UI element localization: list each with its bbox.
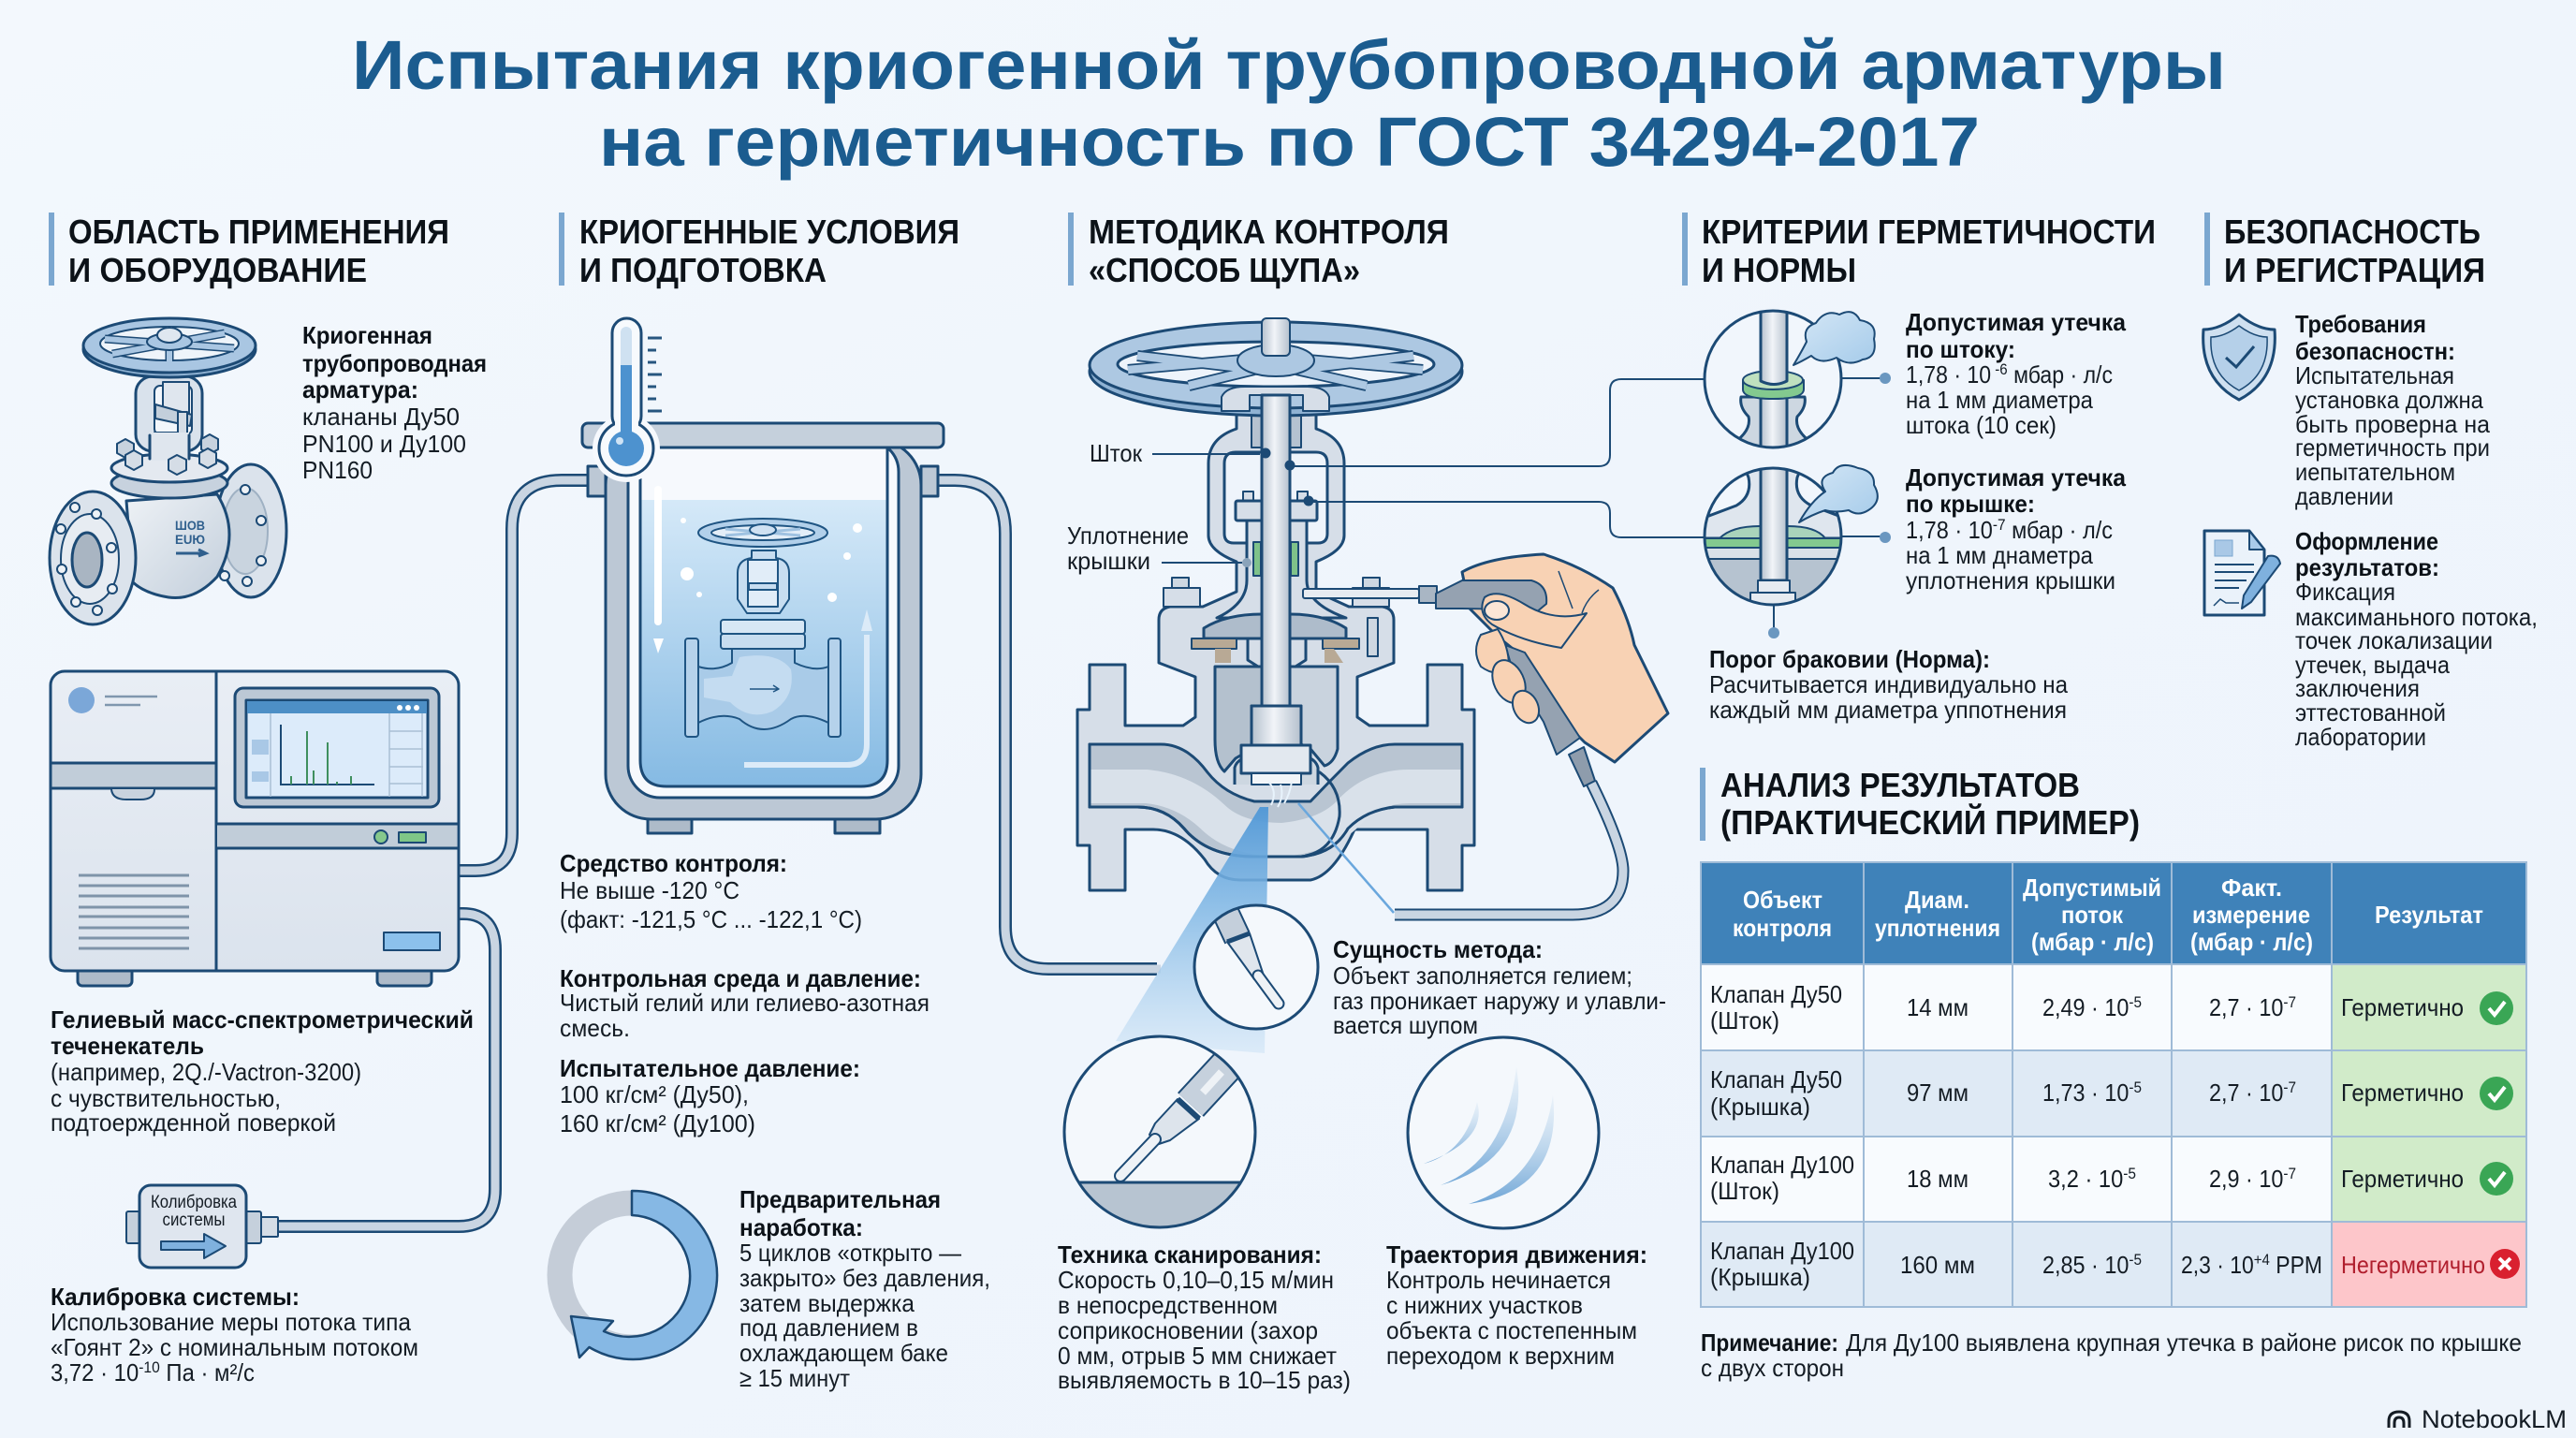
stem — [1262, 395, 1290, 706]
heading: область применения: ОБЛАСТЬ ПРИМЕНЕНИЯ — [68, 213, 449, 251]
table header: измерение — [2192, 901, 2310, 929]
text: течеискатель — [51, 1005, 474, 1137]
row: Ду100 шток: 3,2 · 10 — [2048, 1165, 2130, 1193]
row: Ду50 крышка: 97 мм — [1907, 1078, 1969, 1107]
title: на герметичность по ГОСТ 34294-2017 — [599, 103, 1980, 181]
row: Ду50 шток: (Шток) — [1710, 1006, 1779, 1034]
icon: handwheel — [83, 318, 256, 377]
text: требования безопасности — [2295, 310, 2491, 510]
tank coolant — [640, 448, 887, 786]
heading: методика контроля: «СПОСОБ ЩУПА» — [1089, 251, 1360, 289]
text: испытательное давление: 100 кг/см² (Ду50), — [560, 1080, 749, 1108]
text: утечка по крышке: мбар · л/с — [2006, 516, 2113, 544]
text: требования безопасности: герметичность при — [2295, 433, 2490, 462]
icon: right flange — [215, 464, 286, 597]
text: криогенная арматура: клананы Ду50 — [302, 403, 460, 431]
text: порог браковки: Расчитывается индивидуально на — [1709, 670, 2068, 698]
row: Ду50 крышка: -7 — [2283, 1078, 2296, 1096]
text: утечка по штоку: -6 — [1991, 360, 2008, 378]
text: криогенная арматура — [302, 321, 487, 484]
text: техника сканирования: выявляемость в 10–15 раз) — [1058, 1366, 1351, 1394]
heading: область применения: И ОБОРУДОВАНИЕ — [68, 251, 367, 289]
row: Ду100 крышка: 160 мм — [1900, 1251, 1975, 1279]
text: требования безопасности: Требования — [2295, 310, 2426, 338]
machine indicators — [68, 687, 440, 950]
icon: bonnet with yoke — [111, 376, 227, 498]
row: Ду100 крышка: 2,3 · 10 — [2181, 1251, 2263, 1279]
text: порог браковки: Порог браковии (Норма): — [1709, 645, 1990, 673]
icon: calibration unit — [126, 1185, 278, 1268]
machine feet — [78, 964, 432, 986]
row: Ду100 крышка: Негерметично — [2341, 1251, 2485, 1279]
table header: контроля — [1733, 914, 1832, 942]
text: предварительная наработка: наработка: — [739, 1213, 863, 1241]
text: утечка по штоку: Допустимая утечка — [1906, 308, 2127, 336]
text: калибровка системы — [51, 1283, 418, 1387]
text: утечка по крышке — [1906, 463, 2127, 594]
row: Ду50 крышка: Герметично — [2341, 1078, 2464, 1107]
detail: movement trajectory circle — [1408, 1037, 1599, 1228]
row: Ду50 шток: Клапан Ду50 — [1710, 980, 1842, 1008]
connecting tube: detector to tank — [457, 480, 592, 871]
text: оформление результатов — [2295, 527, 2538, 751]
probe cable — [1395, 747, 1623, 915]
text: течеискатель: (например, 2Q./-Vactron-3200) — [51, 1058, 361, 1086]
leader lines to detail circles — [1284, 379, 1705, 537]
text: утечка по штоку — [1906, 308, 2127, 439]
machine case — [51, 671, 459, 971]
text: утечка по штоку: мбар · л/с — [2008, 360, 2113, 389]
row: Ду100 крышка: (Крышка) — [1710, 1263, 1810, 1291]
yoke window — [1224, 452, 1327, 543]
table header: уплотнения — [1875, 914, 2000, 942]
row: Ду100 крышка: PPM — [2270, 1251, 2322, 1279]
text: предварительная наработка — [739, 1185, 990, 1392]
label: уплотнение крышки — [1067, 521, 1251, 575]
note: с двух сторон — [1701, 1354, 1844, 1382]
heading: криогенные условия — [559, 213, 959, 289]
icon: cycle arrow — [560, 1191, 717, 1359]
text: криогенная арматура: арматура: — [302, 375, 418, 404]
text: средство контроля: Не выше -120 °C — [560, 876, 739, 904]
text: контрольная среда — [560, 964, 929, 1042]
table header: Допустимый — [2023, 873, 2161, 902]
text: утечка по крышке: уплотнения крышки — [1906, 566, 2115, 594]
row: Ду100 крышка: +4 — [2254, 1251, 2270, 1269]
connecting tube: tank to probe line — [936, 480, 1161, 969]
text: техника сканирования: Техника сканирования: — [1058, 1240, 1322, 1269]
panel: hand with sniffer probe — [1303, 554, 1668, 915]
text: криогенная арматура: PN160 — [302, 456, 373, 484]
text: калибровка системы: Калибровка системы: — [51, 1283, 300, 1311]
row: Ду100 шток: Герметично — [2341, 1165, 2464, 1193]
valve cavity — [1215, 667, 1338, 771]
table header: Объект — [1743, 886, 1822, 914]
text: техника сканирования: соприкосновении (захор — [1058, 1316, 1318, 1344]
icon: valve body — [126, 494, 229, 598]
detail: stem leak circle — [1705, 304, 1891, 449]
text: техника сканирования: в непосредственном — [1058, 1291, 1278, 1319]
text: криогенная арматура: Криогенная — [302, 321, 432, 349]
flow channel — [1090, 744, 1462, 857]
heading: безопасность: БЕЗОПАСНОСТЬ — [2224, 213, 2481, 251]
table header: Факт. — [2221, 873, 2282, 902]
heading: безопасность — [2204, 213, 2485, 289]
table row backgrounds — [1701, 964, 2526, 1307]
blue magnifier cone — [1116, 807, 1268, 1053]
heading: критерии герметичности — [1682, 213, 2156, 289]
row: Ду50 крышка — [1710, 1065, 2513, 1121]
detail: cover leak circle — [1699, 463, 1891, 638]
row: Ду100 шток: 18 мм — [1907, 1165, 1969, 1193]
text: оформление результатов: лаборатории — [2295, 723, 2426, 751]
heading: анализ результатов: АНАЛИЗ РЕЗУЛЬТАТОВ — [1720, 766, 2080, 804]
tank wall — [606, 440, 921, 819]
row: Ду100 шток: -7 — [2283, 1165, 2296, 1182]
text: средство контроля: (факт: -121,5 °C ... -122,1 °C) — [560, 905, 862, 933]
row: Ду100 шток: 2,9 · 10 — [2209, 1165, 2291, 1193]
note — [1701, 1328, 2522, 1382]
machine vents — [79, 875, 189, 948]
gland with studs — [1236, 492, 1317, 521]
text: сущность метода: газ проникает наружу и улавли- — [1333, 987, 1666, 1015]
text: сущность метода: Сущность метода: — [1333, 935, 1543, 963]
text: оформление результатов: Оформление — [2295, 527, 2438, 555]
text: калибровка системы: -10 — [139, 1358, 160, 1376]
icon: valve body: EUЮ — [175, 532, 205, 547]
row: Ду50 шток — [1710, 980, 2513, 1034]
text: сущность метода: Объект заполняется гелием; — [1333, 961, 1632, 990]
text: траектория движения: переходом к верхним — [1386, 1342, 1615, 1370]
text: калибровка системы: Использование меры потока типа — [51, 1308, 412, 1336]
table header: Результат — [2375, 901, 2483, 929]
row: Ду50 шток: 14 мм — [1907, 993, 1969, 1021]
label: шток: Шток — [1090, 439, 1143, 467]
text: требования безопасности: давлении — [2295, 482, 2393, 510]
title — [352, 26, 2226, 181]
text: траектория движения: Траектория движения: — [1386, 1240, 1647, 1269]
blue detection line — [1298, 803, 1394, 913]
coolant bubbles — [681, 518, 862, 602]
heading: критерии герметичности: КРИТЕРИИ ГЕРМЕТИЧНОСТИ — [1702, 213, 2156, 251]
row: Ду50 крышка: 1,73 · 10 — [2042, 1078, 2139, 1107]
table grid — [1701, 862, 2526, 1307]
valve disc — [1235, 706, 1318, 785]
icon: calibration unit: Колибровка — [151, 1193, 237, 1212]
table header: поток — [2061, 901, 2124, 929]
heading: криогенные условия: И ПОДГОТОВКА — [579, 251, 827, 289]
text: траектория движения: Контроль нечинается — [1386, 1266, 1611, 1294]
text: оформление результатов: утечек, выдача — [2295, 651, 2450, 679]
tank connectors — [588, 466, 938, 496]
text: утечка по штоку: штока (10 сек) — [1906, 411, 2056, 439]
row: Ду100 шток: -5 — [2123, 1165, 2136, 1182]
text: предварительная наработка: Предварительная — [739, 1185, 941, 1213]
text: испытательное давление: 160 кг/см² (Ду100) — [560, 1109, 755, 1137]
table header — [1701, 862, 2526, 964]
submerged valve — [685, 519, 841, 737]
text: оформление результатов: заключения — [2295, 674, 2420, 702]
row: Ду100 крышка: 2,85 · 10 — [2042, 1251, 2139, 1279]
probe rod — [1303, 586, 1437, 603]
text: утечка по крышке: по крышке: — [1906, 490, 2035, 518]
text: контрольная среда: Контрольная среда и давление: — [560, 964, 921, 992]
detail: small probe circle — [1194, 894, 1318, 1029]
panel: valve illustration — [50, 318, 286, 624]
heading: безопасность: И РЕГИСТРАЦИЯ — [2224, 251, 2485, 289]
text: утечка по крышке: Допустимая утечка — [1906, 463, 2127, 492]
text: оформление результатов: Фиксация — [2295, 578, 2395, 606]
label: уплотнение крышки: крышки — [1067, 547, 1150, 575]
label: шток — [1090, 439, 1271, 467]
icon: document with pen — [2204, 531, 2280, 615]
heading: область применения — [49, 213, 449, 289]
text: калибровка системы: 3,72 · 10 — [51, 1358, 147, 1387]
text: испытательное давление: Испытательное давление: — [560, 1054, 860, 1082]
text: оформление результатов: результатов: — [2295, 553, 2439, 581]
table: results — [1701, 862, 2526, 1307]
text: утечка по штоку: на 1 мм диаметра — [1906, 386, 2093, 414]
text: траектория движения: объекта с постепенным — [1386, 1316, 1637, 1344]
machine left band — [51, 763, 216, 800]
row: Ду50 шток: -7 — [2283, 993, 2296, 1011]
icon: shield — [2203, 315, 2275, 400]
text: требования безопасности: иепытательном — [2295, 458, 2455, 486]
text: течеискатель: Гелиевый масс-спектрометрический — [51, 1005, 474, 1034]
text: сущность метода: вается шупом — [1333, 1011, 1478, 1039]
text: течеискатель: теченекатель — [51, 1032, 204, 1060]
text: предварительная наработка: затем выдержка — [739, 1289, 915, 1317]
text: средство контроля — [560, 849, 862, 933]
text: утечка по крышке: на 1 мм днаметра — [1906, 541, 2093, 569]
row: Ду100 крышка — [1710, 1237, 2520, 1291]
tank feet — [648, 813, 880, 833]
row: Ду50 крышка: 2,7 · 10 — [2209, 1078, 2291, 1107]
text: порог браковки: каждый мм диаметра уппотнения — [1709, 696, 2067, 724]
row: Ду100 крышка: -5 — [2129, 1251, 2142, 1269]
handwheel — [1090, 318, 1462, 416]
row: Ду100 шток — [1710, 1151, 2513, 1205]
icon: left flange — [50, 492, 136, 624]
text: траектория движения — [1386, 1240, 1647, 1370]
hand palm — [1462, 554, 1668, 762]
coolant flow arrows — [653, 486, 872, 765]
machine screen — [235, 688, 439, 807]
row: Ду100 шток: Клапан Ду100 — [1710, 1151, 1854, 1179]
row: Ду50 шток: Герметично — [2341, 993, 2464, 1021]
text: калибровка системы: «Гоянт 2» с номинальным потоком — [51, 1333, 418, 1361]
text: утечка по крышке: 1,78 · 10 — [1906, 516, 2002, 544]
text: траектория движения: с нижних участков — [1386, 1291, 1583, 1319]
text: оформление результатов: точек локализации — [2295, 626, 2493, 654]
tank lid — [582, 423, 944, 448]
panel: cooling tank — [582, 423, 944, 833]
heading: методика контроля: МЕТОДИКА КОНТРОЛЯ — [1089, 213, 1449, 251]
panel: main valve cross-section — [1067, 318, 1474, 1053]
heading: критерии герметичности: И НОРМЫ — [1702, 251, 1856, 289]
bonnet bolts — [1164, 578, 1389, 607]
table header: (мбар · л/с) — [2031, 928, 2154, 956]
row: Ду100 крышка: Клапан Ду100 — [1710, 1237, 1854, 1265]
text: криогенная арматура: PN100 и Ду100 — [302, 430, 466, 458]
text: требования безопасности: установка должна — [2295, 386, 2483, 414]
label: уплотнение крышки: Уплотнение — [1067, 521, 1189, 550]
row: Ду50 шток: -5 — [2129, 993, 2142, 1011]
icon: calibration unit: системы — [163, 1211, 225, 1230]
text: предварительная наработка: закрыто» без давления, — [739, 1264, 990, 1292]
text: оформление результатов: эттестованной — [2295, 698, 2446, 726]
text: течеискатель: с чувствительностью, — [51, 1084, 281, 1112]
text: предварительная наработка: 5 циклов «открыто — — [739, 1239, 961, 1267]
text: криогенная арматура: трубопроводная — [302, 349, 487, 377]
panel: mass spectrometer leak detector — [51, 671, 459, 986]
text: средство контроля: Средство контроля: — [560, 849, 787, 877]
heading: анализ результатов — [1700, 766, 2140, 842]
text: предварительная наработка: охлаждающем баке — [739, 1339, 948, 1367]
heading: анализ результатов: (ПРАКТИЧЕСКИЙ ПРИМЕР) — [1720, 802, 2140, 842]
row: Ду50 крышка: (Крышка) — [1710, 1093, 1810, 1121]
icon: thermometer — [593, 318, 662, 482]
text: требования безопасности: безопасностн: — [2295, 337, 2455, 365]
text: порог браковки — [1709, 645, 2068, 724]
text: оформление результатов: максиманьного потока, — [2295, 603, 2538, 631]
row: Ду50 крышка: -5 — [2129, 1078, 2142, 1096]
text: техника сканирования: Скорость 0,10–0,15 м/мин — [1058, 1266, 1334, 1294]
text: контрольная среда: смесь. — [560, 1014, 630, 1042]
text: калибровка системы: Па · м²/с — [160, 1358, 255, 1387]
title: Испытания криогенной трубопроводной арматуры — [352, 26, 2226, 104]
text: утечка по штоку: по штоку: — [1906, 335, 2015, 363]
sealing packing — [1253, 542, 1298, 576]
text: предварительная наработка: ≥ 15 минут — [739, 1364, 850, 1392]
table header: Диам. — [1905, 886, 1969, 914]
text: требования безопасности: быть проверна на — [2295, 410, 2491, 438]
text: контрольная среда: Чистый гелий или гелиево-азотная — [560, 989, 929, 1017]
text: техника сканирования — [1058, 1240, 1351, 1394]
row: Ду50 крышка: Клапан Ду50 — [1710, 1065, 1842, 1093]
valve housing — [1077, 413, 1474, 890]
row: Ду100 шток: (Шток) — [1710, 1177, 1779, 1205]
text: предварительная наработка: под давлением в — [739, 1313, 918, 1342]
text: условия контроля — [560, 849, 929, 1137]
heading: методика контроля — [1068, 213, 1449, 289]
text: техника сканирования: 0 мм, отрыв 5 мм снижает — [1058, 1342, 1337, 1370]
text: утечка по штоку: 1,78 · 10 — [1906, 360, 2002, 389]
text: требования безопасности: Испытательная — [2295, 361, 2454, 389]
heading: криогенные условия: КРИОГЕННЫЕ УСЛОВИЯ — [579, 213, 959, 251]
text: утечка по крышке: -7 — [1993, 516, 2006, 534]
icon: valve body: ШОВ — [175, 518, 205, 533]
table header: (мбар · л/с) — [2190, 928, 2313, 956]
note: Примечание: — [1701, 1328, 1838, 1357]
row: Ду50 шток: 2,49 · 10 — [2042, 993, 2139, 1021]
helium leak spark — [1268, 782, 1292, 807]
bonnet neck — [1192, 521, 1378, 667]
text: испытательное давление — [560, 1054, 860, 1137]
detail: large probe circle — [1058, 1036, 1264, 1239]
text: течеискатель: подтоержденной поверкой — [51, 1108, 336, 1137]
note: Для Ду100 выявлена крупная утечка в районе рисок по крышке — [1846, 1328, 2522, 1357]
logo: NotebookLM: NotebookLM — [2422, 1405, 2567, 1433]
hand fingers — [1476, 571, 1599, 727]
text: сущность метода — [1333, 935, 1666, 1039]
row: Ду50 шток: 2,7 · 10 — [2209, 993, 2291, 1021]
stem sleeve — [1251, 395, 1301, 448]
connecting tube: detector to calibrator — [277, 914, 495, 1226]
machine divider lines — [216, 671, 459, 971]
probe grip — [1436, 580, 1580, 755]
